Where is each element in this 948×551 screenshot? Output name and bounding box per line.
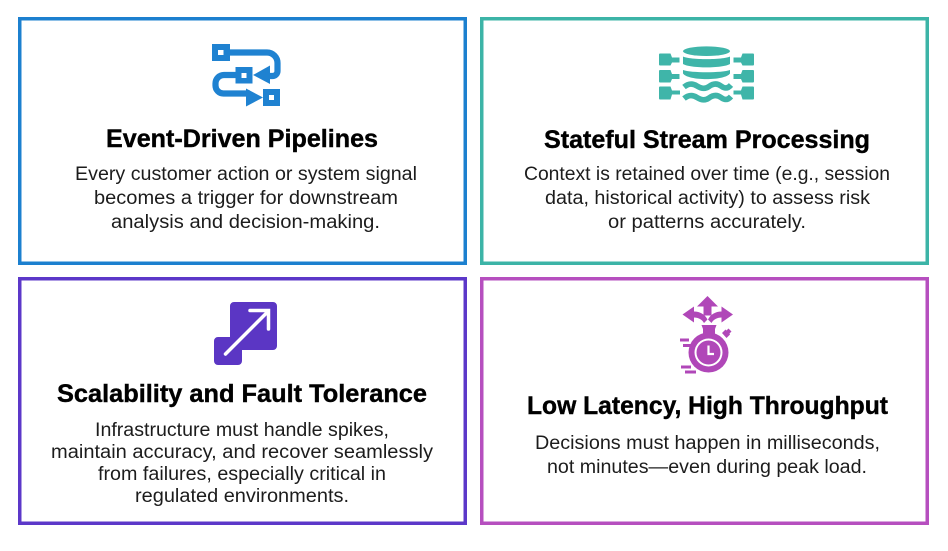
text block: or patterns accurately. xyxy=(608,212,806,233)
icon: database stream xyxy=(659,46,754,100)
heading: Stateful Stream Processing xyxy=(544,126,870,154)
text block: Every customer action or system signal xyxy=(75,164,417,185)
text block: Infrastructure must handle spikes, xyxy=(95,420,389,441)
heading: Low Latency, High Throughput xyxy=(527,392,889,420)
text block: data, historical activity) to assess risk xyxy=(545,188,871,209)
text block: regulated environments. xyxy=(135,486,349,507)
text block: maintain accuracy, and recover seamlessly xyxy=(51,442,434,463)
panel: stateful stream processing xyxy=(482,19,927,263)
text block: from failures, especially critical in xyxy=(98,464,386,485)
text block: Context is retained over time (e.g., session xyxy=(524,164,890,185)
panel: low latency, high throughput xyxy=(482,279,927,523)
text block xyxy=(51,420,434,507)
heading: Event-Driven Pipelines xyxy=(106,125,378,153)
text block xyxy=(535,433,880,478)
text block: not minutes—even during peak load. xyxy=(547,457,867,478)
text block: becomes a trigger for downstream xyxy=(94,188,398,209)
text block xyxy=(524,164,890,233)
heading: Scalability and Fault Tolerance xyxy=(57,380,427,408)
text block: analysis and decision-making. xyxy=(111,212,380,233)
text block: Decisions must happen in milliseconds, xyxy=(535,433,880,454)
text block xyxy=(75,164,417,233)
icon: stopwatch with arrows xyxy=(680,296,733,374)
panel: event-driven pipelines xyxy=(20,19,465,263)
icon: flow pipeline xyxy=(212,44,280,106)
panel: scalability and fault tolerance xyxy=(20,279,465,523)
icon: scale arrow xyxy=(214,302,277,365)
